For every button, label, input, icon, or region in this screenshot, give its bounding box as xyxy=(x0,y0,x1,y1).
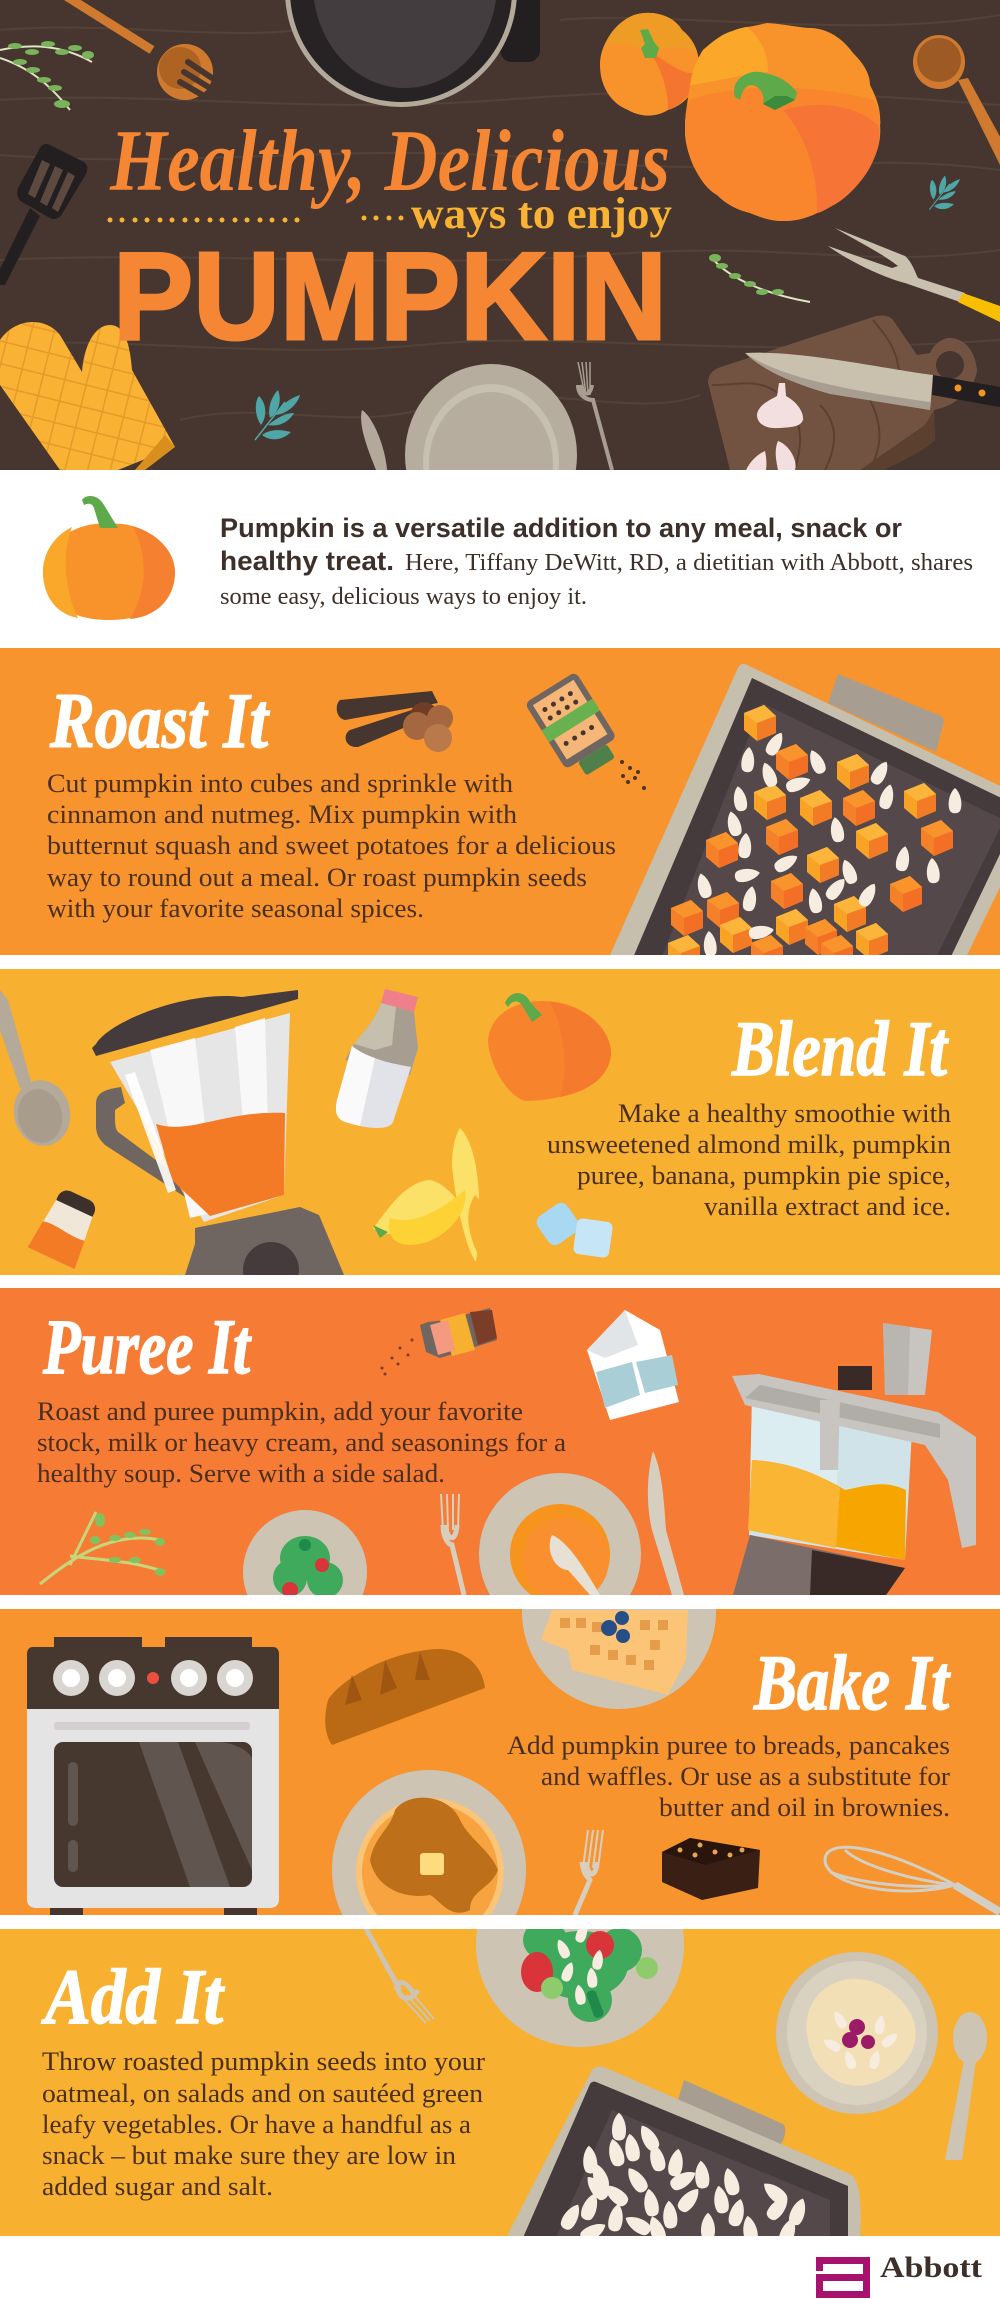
icon: fork below text xyxy=(575,1830,603,1915)
icon: fork xyxy=(578,362,612,470)
text: puree body xyxy=(37,1397,566,1488)
panel: Blend It xyxy=(0,969,1000,1298)
icon: plate xyxy=(405,364,577,470)
text: add body: Throw roasted pumpkin seeds into your xyxy=(42,2047,485,2076)
icon: fork left of soup xyxy=(441,1494,464,1595)
text: bake body: Add pumpkin puree to breads, pancakes xyxy=(507,1731,950,1760)
text: roast body: Cut pumpkin into cubes and sprinkle with xyxy=(47,769,513,798)
text: roast body xyxy=(47,769,616,923)
icon: spoon xyxy=(945,2012,987,2160)
heading: Blend It: Blend It xyxy=(731,1005,949,1092)
text: add body: oatmeal, on salads and on sautéed green xyxy=(42,2079,483,2108)
text: puree body: healthy soup. Serve with a side salad. xyxy=(37,1459,445,1488)
text: puree body: Roast and puree pumpkin, add your favorite xyxy=(37,1397,523,1426)
title: Healthy, Delicious ways to enjoy PUMPKIN xyxy=(108,129,672,342)
icon: herb sprig right xyxy=(709,254,810,302)
icon: soup bowl with spoon xyxy=(479,1473,641,1635)
text: roast body: butternut squash and sweet potatoes for a delicious xyxy=(47,831,616,860)
icon: cutting board xyxy=(708,316,977,470)
text: intro paragraph: some easy, delicious ways to enjoy it. xyxy=(220,584,587,610)
icon: pancake plate xyxy=(332,1770,526,1970)
icon: herb sprigs top left xyxy=(0,41,94,110)
title: Healthy, Delicious ways to enjoy PUMPKIN: Healthy, Delicious xyxy=(109,113,670,210)
text: intro paragraph xyxy=(220,513,973,610)
icon: tray of pumpkin seeds xyxy=(505,2067,861,2247)
icon: ice cubes xyxy=(536,1202,613,1258)
icon: roasting tray with pumpkin cubes and seeds xyxy=(610,664,1000,955)
text: add body: snack – but make sure they are low in xyxy=(42,2141,456,2170)
icon: intro pumpkin xyxy=(43,496,175,620)
text: add body: leafy vegetables. Or have a handful as a xyxy=(42,2110,471,2139)
heading: Add It: Add It xyxy=(41,1953,225,2040)
icon: chef knife xyxy=(745,353,1000,410)
heading: Bake It: Bake It xyxy=(753,1639,951,1726)
icon: pepper sprinkles xyxy=(620,760,646,790)
icon: salt shaker xyxy=(28,1190,96,1270)
icon: whisk xyxy=(825,1847,1000,1912)
icon: oatmeal bowl xyxy=(776,1952,938,2114)
text: add body xyxy=(42,2047,485,2201)
icon: table knife right of soup xyxy=(648,1451,684,1595)
text: blend body: puree, banana, pumpkin pie spice, xyxy=(577,1161,951,1190)
icon: milk bottle xyxy=(336,989,418,1128)
icon: large pumpkin xyxy=(685,23,880,221)
icon: brownie xyxy=(662,1838,760,1900)
text: add body: added sugar and salt. xyxy=(42,2172,273,2201)
icon: blender xyxy=(92,990,344,1298)
panel: intro xyxy=(43,496,973,620)
panel: Roast It xyxy=(0,648,1000,955)
text: roast body: cinnamon and nutmeg. Mix pumpkin with xyxy=(47,800,517,829)
text: intro paragraph: healthy treat. xyxy=(220,546,394,576)
icon: spice jar pouring xyxy=(380,1308,497,1376)
icon: table knife xyxy=(361,410,387,470)
icon: blend pumpkin xyxy=(488,993,611,1101)
icon: fork xyxy=(364,1925,434,2023)
text: puree body: stock, milk or heavy cream, and seasonings for a xyxy=(37,1428,566,1457)
heading: Roast It: Roast It xyxy=(49,677,270,764)
text: blend body: Make a healthy smoothie with xyxy=(618,1099,951,1128)
icon: oven xyxy=(27,1637,279,1915)
icon: garlic bulb and cloves xyxy=(746,383,803,470)
icon: milk carton xyxy=(587,1310,679,1420)
icon: bread loaf xyxy=(325,1649,485,1745)
text: roast body: way to round out a meal. Or roast pumpkin seeds xyxy=(47,863,587,892)
title: Healthy, Delicious ways to enjoy PUMPKIN: PUMPKIN xyxy=(113,228,667,366)
panel: Puree It xyxy=(0,1288,1000,1595)
logo: Abbott xyxy=(816,2251,982,2298)
icon: spice jar xyxy=(526,674,615,774)
text: blend body: vanilla extract and ice. xyxy=(704,1192,951,1221)
panel: header wood table xyxy=(0,0,1000,470)
panel: Add It xyxy=(0,1843,1000,2247)
icon: wooden slotted spoon xyxy=(66,0,213,100)
icon: small pumpkin xyxy=(600,13,699,116)
text: bake body: and waffles. Or use as a substitute for xyxy=(541,1762,950,1791)
icon: side salad plate xyxy=(243,1510,367,1634)
title: Healthy, Delicious ways to enjoy PUMPKIN: ways to enjoy xyxy=(411,189,672,238)
icon: waffle plate xyxy=(522,1515,716,1709)
icon: cinnamon and nutmeg xyxy=(337,691,453,752)
text: intro paragraph: Here, Tiffany DeWitt, RD, a dietitian with Abbott, shares xyxy=(405,550,973,576)
text: blend body xyxy=(547,1099,951,1221)
icon: banana xyxy=(373,1128,489,1262)
icon: black spatula xyxy=(0,144,87,285)
panel: Bake It xyxy=(0,1515,1000,1970)
text: intro paragraph: Pumpkin is a versatile addition to any meal, snack or xyxy=(220,513,902,543)
text: bake body: butter and oil in brownies. xyxy=(659,1793,950,1822)
logo: Abbott: Abbott xyxy=(880,2251,982,2284)
heading: Puree It: Puree It xyxy=(42,1303,252,1390)
icon: carving fork xyxy=(828,228,1000,322)
icon: salad plate xyxy=(476,1843,684,2047)
icon: teal leaf upper xyxy=(929,176,960,210)
icon: wooden spoon right xyxy=(913,35,1000,165)
icon: frying pan xyxy=(285,0,540,107)
icon: teal leaf lower xyxy=(255,390,300,440)
icon: oven mitt xyxy=(0,322,175,470)
text: roast body: with your favorite seasonal spices. xyxy=(47,894,424,923)
icon: wooden spoon xyxy=(0,990,70,1146)
icon: food processor xyxy=(732,1323,976,1595)
text: bake body xyxy=(507,1731,950,1822)
text: blend body: unsweetened almond milk, pumpkin xyxy=(547,1130,951,1159)
icon: thyme sprig xyxy=(40,1512,165,1584)
